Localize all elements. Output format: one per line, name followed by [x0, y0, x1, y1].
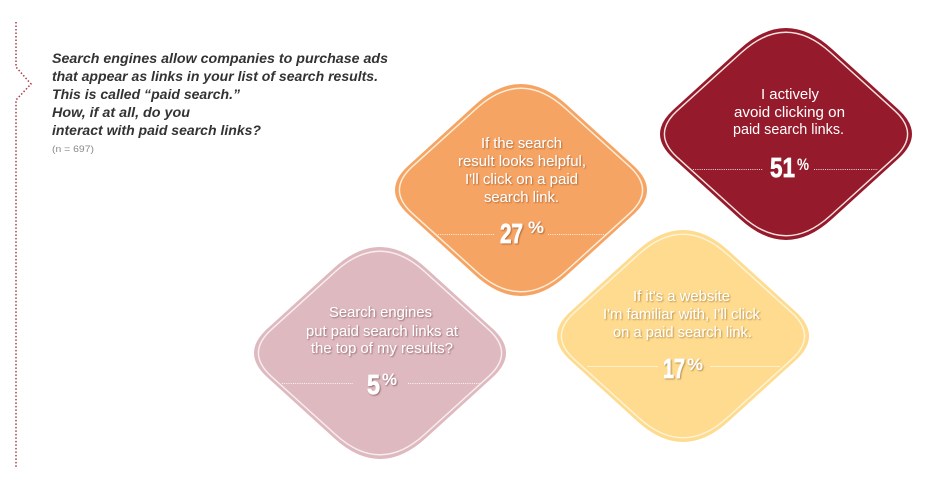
- panel: 5 percent unaware: Search engines: [329, 305, 432, 321]
- panel: 17 percent familiar: %: [687, 355, 703, 374]
- panel: 17 percent familiar: I'm familiar with, I'll click: [603, 307, 761, 323]
- panel: 51 percent avoid: %: [797, 155, 809, 174]
- panel: 17 percent familiar: on a paid search link.: [613, 325, 752, 341]
- sample size note: (n = 697): [52, 144, 94, 154]
- question text block: How, if at all, do you: [52, 105, 191, 120]
- panel: 5 percent unaware: 5: [367, 369, 380, 400]
- panel: 27 percent helpful: If the search: [481, 136, 562, 152]
- panel: 51 percent avoid: I actively: [761, 87, 820, 103]
- panel: 17 percent familiar: 17: [663, 353, 685, 384]
- panel: 5 percent unaware: [254, 247, 506, 459]
- dotted timeline with chevron: [16, 22, 31, 467]
- panel: 27 percent helpful: [395, 84, 647, 296]
- panel: 17 percent familiar: If it's a website: [633, 289, 730, 305]
- panel: 27 percent helpful: result looks helpful,: [458, 154, 586, 170]
- question text block: that appear as links in your list of search results.: [52, 69, 378, 84]
- panel: 27 percent helpful: 27: [500, 218, 523, 249]
- panel: 5 percent unaware: put paid search links at: [306, 324, 458, 340]
- question text block: This is called “paid search.”: [52, 87, 240, 102]
- panel: 5 percent unaware: %: [382, 370, 397, 389]
- question text block: interact with paid search links?: [52, 123, 262, 138]
- panel: 51 percent avoid: paid search links.: [733, 122, 844, 138]
- panel: 5 percent unaware: the top of my results?: [311, 341, 453, 357]
- panel: 27 percent helpful: I'll click on a paid: [465, 172, 578, 188]
- panel: 51 percent avoid: [660, 28, 912, 240]
- panel: 51 percent avoid: avoid clicking on: [734, 105, 845, 121]
- panel: 51 percent avoid: 51: [770, 152, 795, 183]
- panel: 27 percent helpful: search link.: [484, 190, 559, 206]
- panel: 17 percent familiar: [557, 230, 809, 442]
- panel: 27 percent helpful: %: [528, 218, 544, 237]
- question text block: [52, 51, 388, 154]
- question text block: Search engines allow companies to purchase ads: [52, 51, 388, 66]
